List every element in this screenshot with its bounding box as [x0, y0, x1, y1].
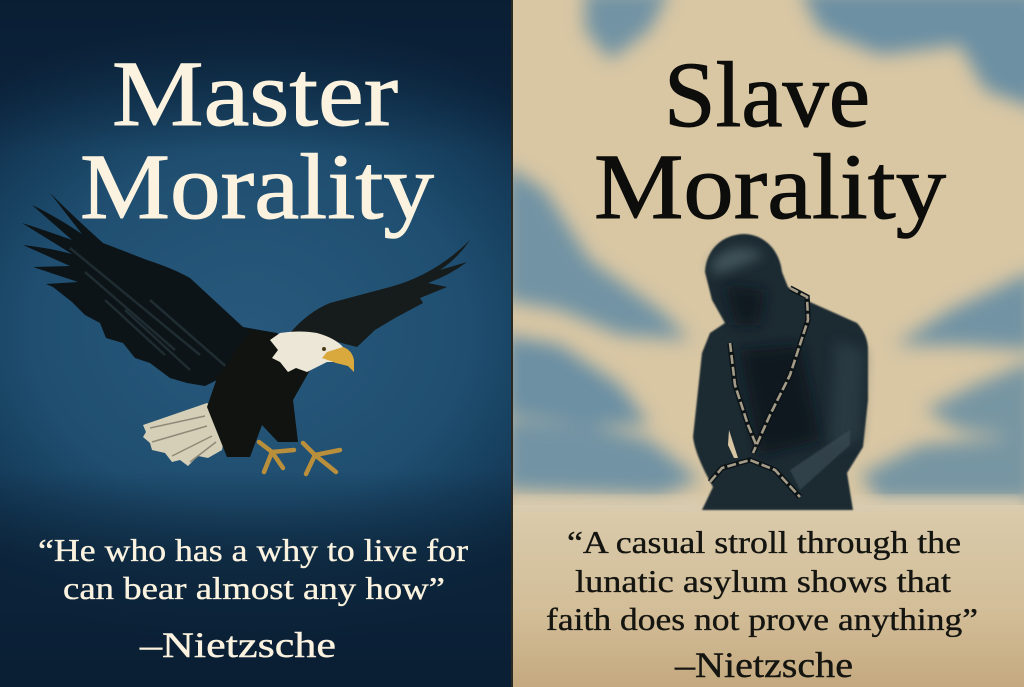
- panel divider: [511, 0, 513, 687]
- panel background: dark blue sky: [0, 18, 511, 629]
- quote: lunatic asylum: lunatic asylum shows that: [575, 563, 951, 599]
- title: Master Morality: Morality: [80, 136, 435, 239]
- eagle talons: [259, 442, 340, 474]
- eagle beak: [322, 347, 354, 372]
- icon: chained kneeling figure: [693, 234, 868, 510]
- attribution: –Nietzsche: [139, 625, 336, 665]
- quote: why to live: “He who has a why to live for: [38, 532, 468, 568]
- panel background: parchment sky: [513, 0, 1024, 505]
- figure body: [693, 234, 868, 510]
- blue clouds: [505, 0, 1024, 500]
- eagle left wing: [22, 193, 290, 390]
- eagle tail: [143, 403, 228, 466]
- quote: lunatic asylum: [546, 524, 978, 637]
- gap between arm and torso: [728, 430, 738, 458]
- quote: why to live: can bear almost any how”: [63, 570, 445, 606]
- title: Master Morality: [82, 63, 434, 239]
- title: Slave Morality: Morality: [594, 136, 947, 239]
- icon: bald eagle in flight: [22, 193, 470, 474]
- eagle body and legs: [207, 330, 310, 457]
- title: Slave Morality: [594, 44, 947, 239]
- chain: [710, 288, 808, 497]
- eagle right wing: [290, 240, 470, 347]
- quote: lunatic asylum: faith does not prove anything”: [546, 601, 978, 637]
- panel: master morality: [0, 0, 512, 687]
- attribution: –Nietzsche: [674, 645, 853, 685]
- quote: lunatic asylum: “A casual stroll through the: [567, 524, 961, 560]
- arm highlight: [790, 430, 850, 490]
- quote: why to live: [38, 532, 468, 606]
- title: Master Morality: Master: [112, 43, 398, 146]
- panel: slave morality: [505, 0, 1024, 687]
- title: Slave Morality: Slave: [664, 44, 870, 147]
- figure shading: [712, 248, 765, 275]
- sand ground: [513, 505, 1024, 687]
- eagle head: [270, 332, 343, 372]
